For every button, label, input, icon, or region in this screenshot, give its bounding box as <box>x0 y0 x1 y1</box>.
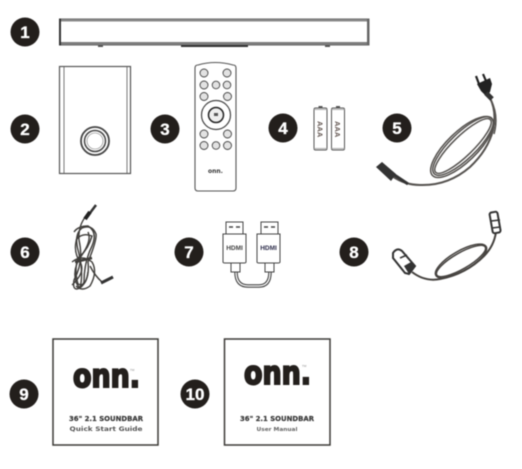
item 5: power cable <box>376 74 502 186</box>
AAA battery pair <box>314 106 344 150</box>
item 8: optical cable <box>340 211 501 284</box>
badge 9: 9 <box>19 385 29 404</box>
item 1: soundbar <box>10 18 370 47</box>
badge 1 <box>10 18 40 46</box>
manual booklet: 36" 2.1 SOUNDBAR <box>240 415 315 423</box>
badge 7: 7 <box>184 243 194 262</box>
badge 6: 6 <box>20 243 30 262</box>
badge 9 <box>10 380 38 408</box>
HDMI cable and connectors: HDMI <box>226 245 243 252</box>
badge 5: 5 <box>392 119 402 138</box>
item 7: HDMI cable <box>174 222 280 286</box>
manual booklet <box>224 339 330 445</box>
AAA battery pair: AAA <box>316 121 324 138</box>
item 9: quick start guide <box>10 339 158 445</box>
coiled 3.5mm cable <box>72 205 113 289</box>
guide booklet: TM <box>130 368 135 372</box>
manual booklet: TM <box>302 364 307 368</box>
guide booklet: 36" 2.1 SOUNDBAR <box>69 415 144 423</box>
item 3: remote control <box>150 62 236 191</box>
badge 4: 4 <box>278 119 288 138</box>
HDMI cable and connectors: HDMI <box>260 245 277 252</box>
coiled optical cable <box>393 211 501 284</box>
badge 2: 2 <box>20 120 30 139</box>
badge 10 <box>180 380 210 408</box>
item 4: batteries <box>268 106 344 150</box>
AAA battery pair: AAA <box>333 121 342 138</box>
manual booklet: onn. <box>244 354 311 392</box>
remote body: onn. <box>208 168 223 175</box>
item 2: subwoofer <box>10 66 130 174</box>
soundbar body <box>59 18 370 47</box>
subwoofer cabinet <box>60 66 130 174</box>
badge 3: 3 <box>160 120 170 139</box>
badge 8: 8 <box>349 243 359 262</box>
guide booklet <box>53 339 158 445</box>
coiled power cord <box>376 74 502 186</box>
item 6: audio cable <box>10 205 113 289</box>
badge 1: 1 <box>20 23 30 42</box>
badge 10: 10 <box>186 385 204 404</box>
guide booklet: onn. <box>73 357 140 395</box>
HDMI cable and connectors <box>223 222 280 286</box>
manual booklet: User Manual <box>256 427 298 433</box>
item 10: user manual <box>180 339 330 445</box>
guide booklet: Quick Start Guide <box>70 425 143 433</box>
badge 8 <box>340 238 368 266</box>
